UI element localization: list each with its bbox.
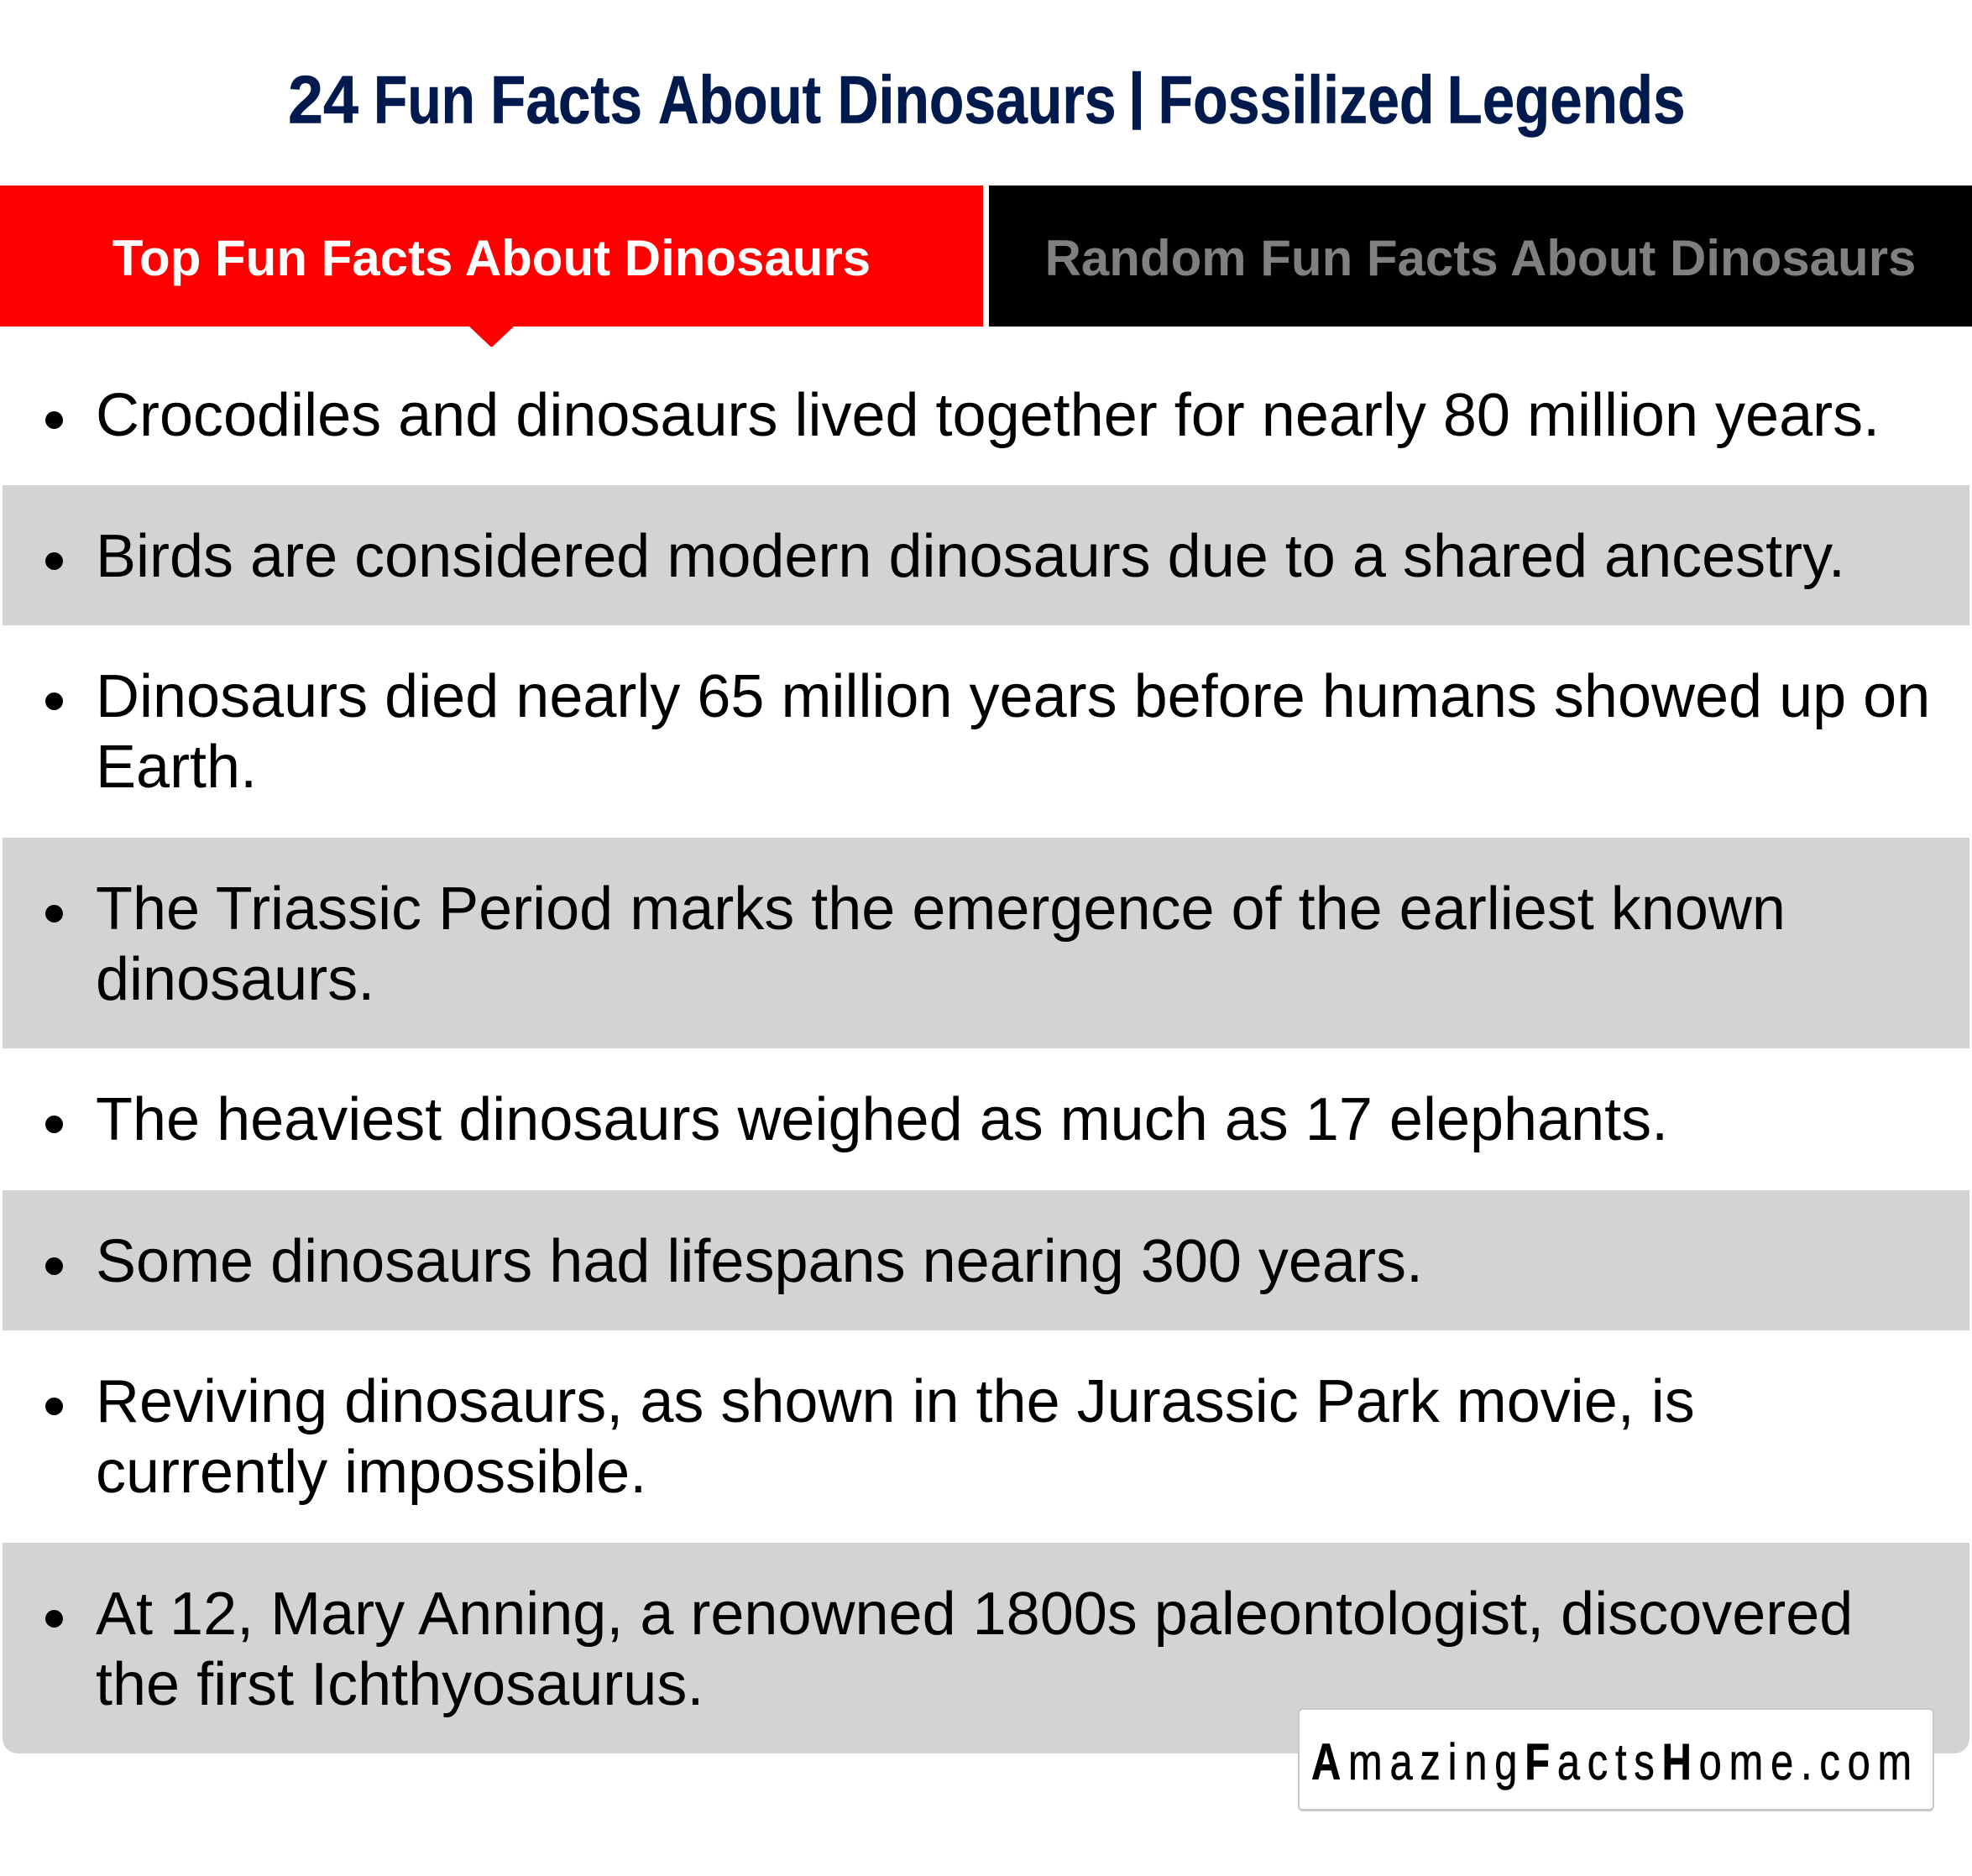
- title: 24: [288, 62, 358, 138]
- fact 3: Dinosaurs died nearly 65 million years before humans showed up on: [96, 663, 1930, 730]
- title: |: [1128, 61, 1145, 129]
- fact 3: [45, 663, 1930, 801]
- fact 2: Birds are considered modern dinosaurs due to a shared ancestry.: [96, 523, 1845, 590]
- fact 6: [3, 1190, 1969, 1330]
- fact 1: Crocodiles and dinosaurs lived together for nearly 80 million years.: [96, 382, 1880, 449]
- fact 5: The heaviest dinosaurs weighed as much as 17 elephants.: [96, 1086, 1668, 1153]
- fact 2: [3, 485, 1969, 625]
- title: Facts: [490, 62, 642, 138]
- title: Legends: [1447, 62, 1686, 138]
- fact 7: [45, 1368, 1695, 1506]
- fact 8: the first Ichthyosaurus.: [96, 1651, 704, 1718]
- tab: random fun facts: [989, 186, 1972, 327]
- title: About: [658, 62, 821, 138]
- tab: random fun facts: Random Fun Facts About Dinosaurs: [1045, 230, 1916, 286]
- fact 3: Earth.: [96, 734, 257, 801]
- watermark text: AmazingFactsHome.com: [1311, 1733, 1912, 1790]
- tab: top fun facts: [0, 186, 983, 327]
- title: Dinosaurs: [838, 62, 1117, 138]
- tab: top fun facts: Top Fun Facts About Dinosaurs: [112, 230, 871, 286]
- fact 4: dinosaurs.: [96, 946, 374, 1013]
- watermark badge: [1298, 1708, 1934, 1811]
- fact 8: [3, 1543, 1969, 1753]
- fact 6: Some dinosaurs had lifespans nearing 300 years.: [96, 1228, 1423, 1295]
- tab arrow: [469, 327, 514, 347]
- fact 7: currently impossible.: [96, 1439, 646, 1506]
- title: [288, 61, 1686, 138]
- title: Fossilized: [1159, 62, 1434, 138]
- fact 8: At 12, Mary Anning, a renowned 1800s paleontologist, discovered: [96, 1581, 1853, 1648]
- fact 4: The Triassic Period marks the emergence of the earliest known: [96, 875, 1786, 943]
- fact 7: Reviving dinosaurs, as shown in the Jurassic Park movie, is: [96, 1368, 1695, 1435]
- title: Fun: [374, 62, 475, 138]
- fact 4: [3, 838, 1969, 1048]
